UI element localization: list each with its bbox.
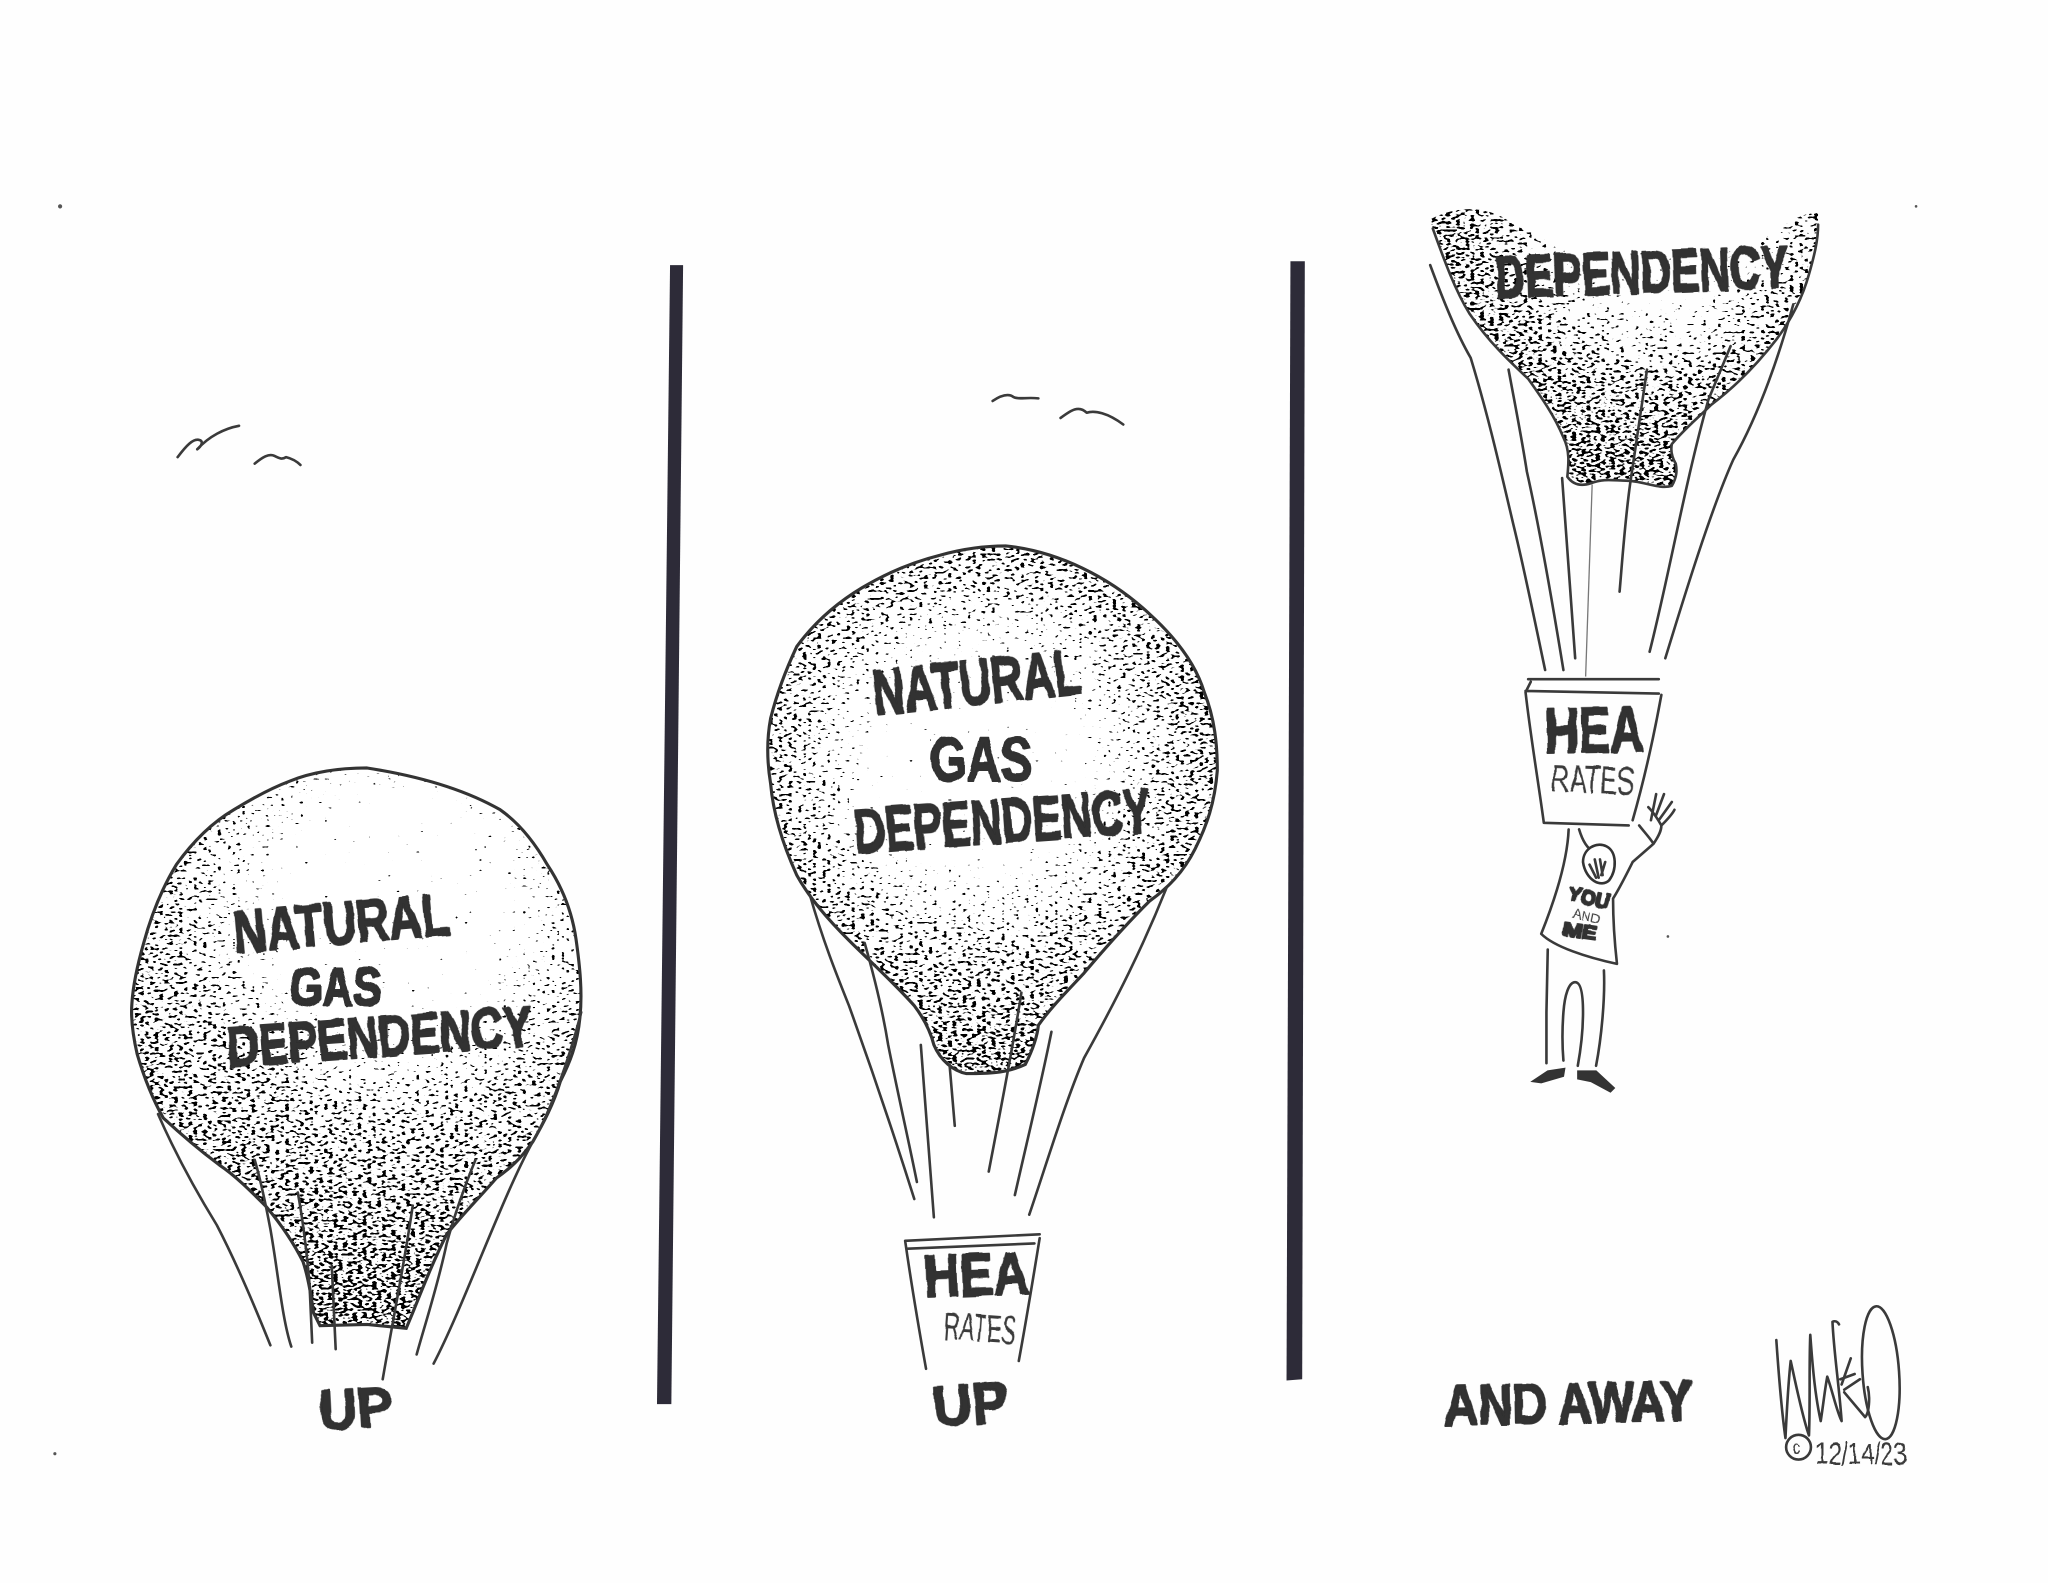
panel 1: up — [124, 426, 588, 1441]
date: 12/14/23 — [1816, 1436, 1907, 1471]
shirt text: YOU — [1566, 883, 1612, 913]
person legs — [1546, 950, 1604, 1066]
basket 2: HEA — [923, 1239, 1030, 1310]
birds panel 2 — [993, 395, 1123, 424]
person shoes — [1532, 1068, 1614, 1092]
balloon 3 label: DEPENDENCY — [1494, 234, 1790, 311]
caption up 1: UP — [317, 1375, 394, 1441]
basket 2 — [905, 1234, 1040, 1369]
balloon 2 label: GAS — [930, 725, 1032, 795]
balloon 3 — [1424, 202, 1829, 496]
panel 3: and away — [1424, 202, 1907, 1471]
balloon 1 label — [225, 881, 534, 1080]
divider 1 — [657, 265, 683, 1404]
person hair — [1590, 859, 1605, 878]
balloon 1 label: DEPENDENCY — [225, 995, 534, 1080]
balloon 1 label: GAS — [290, 956, 381, 1018]
divider 2 — [1287, 261, 1305, 1381]
ropes panel 2 — [810, 888, 1166, 1217]
shirt text: AND — [1570, 906, 1602, 928]
copyright circle — [1786, 1435, 1811, 1460]
shirt text: ME — [1562, 918, 1598, 944]
person head — [1583, 845, 1615, 883]
person: you and me — [1532, 794, 1674, 1092]
birds panel 1 — [178, 426, 300, 465]
ropes panel 3 — [1430, 265, 1793, 677]
panel 2: up — [758, 395, 1228, 1439]
balloon 2 — [758, 536, 1228, 1084]
balloon 1 — [124, 758, 588, 1332]
caption up 2: UP — [930, 1370, 1010, 1439]
balloon 1 label: NATURAL — [230, 881, 452, 966]
balloon 2 label: NATURAL — [869, 635, 1084, 730]
caption and away: AND AWAY — [1444, 1370, 1693, 1438]
shirt text — [1562, 883, 1612, 944]
ropes panel 1 — [158, 1012, 581, 1379]
balloon 2 label: DEPENDENCY — [852, 776, 1154, 867]
basket 2: RATES — [942, 1305, 1018, 1353]
paper specks — [53, 204, 1917, 1455]
copyright mark: c — [1792, 1439, 1801, 1458]
signature — [1776, 1305, 1907, 1471]
basket 3: RATES — [1550, 758, 1635, 803]
basket 3: HEA — [1544, 693, 1645, 768]
basket 3 — [1526, 679, 1661, 825]
balloon 2 label — [852, 635, 1154, 867]
